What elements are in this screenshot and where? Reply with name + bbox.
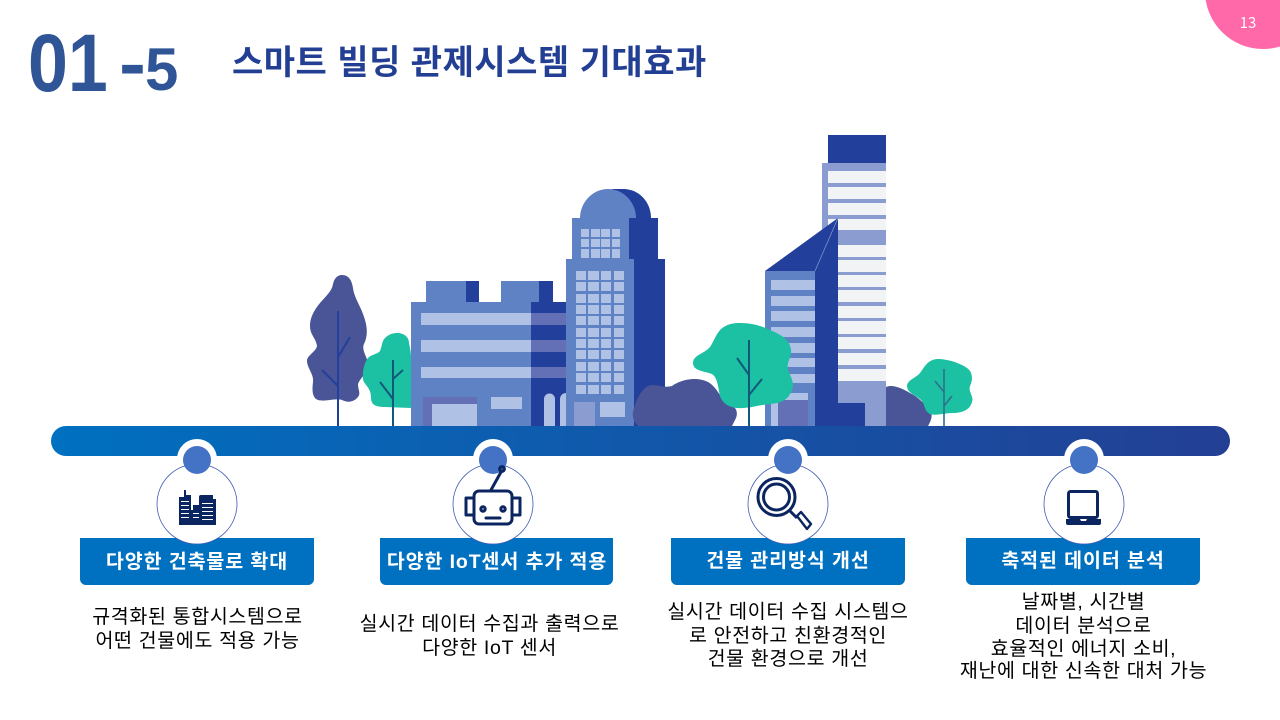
item 2: 다양한 IoT센서 추가 적용 <box>360 439 619 659</box>
item 1 label box <box>80 538 314 585</box>
tree: left purple <box>307 275 368 426</box>
icon: laptop <box>1066 492 1101 525</box>
item 4 description: 데이터 분석으로 <box>1015 615 1152 637</box>
item 4 node <box>1044 439 1124 544</box>
timeline bar <box>51 426 1230 456</box>
bush: right purple <box>886 386 932 426</box>
item 3 node <box>748 439 828 544</box>
icon: robot <box>466 467 520 524</box>
illustration: city skyline <box>307 135 972 426</box>
page number badge: 13 <box>1240 12 1256 33</box>
section number: - <box>119 24 146 104</box>
item 3 description: 로 안전하고 친환경적인 <box>689 625 887 647</box>
icon: magnifying glass <box>758 478 811 529</box>
item 2 description: 실시간 데이터 수집과 출력으로 <box>360 613 619 635</box>
building: dome tower <box>566 189 665 426</box>
title: 스마트 빌딩 관제시스템 기대효과 <box>232 44 707 82</box>
tree: small green <box>907 359 972 426</box>
item 1 label box: 다양한 건축물로 확대 <box>106 551 288 573</box>
item 3 description: 실시간 데이터 수집 시스템으 <box>667 601 909 623</box>
item 3 label box: 건물 관리방식 개선 <box>706 550 870 572</box>
item 1 description: 규격화된 통합시스템으로 <box>92 606 303 628</box>
tree: left green <box>363 333 411 426</box>
item 3: 건물 관리방식 개선 <box>667 439 909 670</box>
item 2 node <box>453 439 533 544</box>
icon: city buildings <box>179 490 216 525</box>
item 1 node <box>157 439 237 544</box>
item 2 description: 다양한 IoT 센서 <box>422 637 557 659</box>
item 4 label box: 축적된 데이터 분석 <box>1001 550 1165 572</box>
item 2 label box: 다양한 IoT센서 추가 적용 <box>387 551 607 573</box>
item 3 label box <box>671 538 905 585</box>
bush: centre purple <box>633 379 737 426</box>
item 3 description: 건물 환경으로 개선 <box>708 648 868 670</box>
item 4 description: 재난에 대한 신속한 대처 가능 <box>960 660 1207 682</box>
item 1 description: 어떤 건물에도 적용 가능 <box>95 630 300 652</box>
building: angled roof tower <box>765 218 865 426</box>
page number badge <box>1205 0 1280 49</box>
section number <box>28 18 178 109</box>
building: tall striped tower <box>822 135 886 426</box>
tree: large green <box>693 323 793 426</box>
section number: 01 <box>28 18 108 109</box>
item 4: 축적된 데이터 분석 <box>960 439 1207 682</box>
item 4 label box <box>966 538 1200 585</box>
item 1: 다양한 건축물로 확대 <box>80 439 314 652</box>
item 2 label box <box>380 538 613 585</box>
building: low office <box>411 281 567 426</box>
item 4 description: 날짜별, 시간별 <box>1022 591 1145 613</box>
item 4 description: 효율적인 에너지 소비, <box>991 638 1176 660</box>
section number: 5 <box>145 36 178 103</box>
